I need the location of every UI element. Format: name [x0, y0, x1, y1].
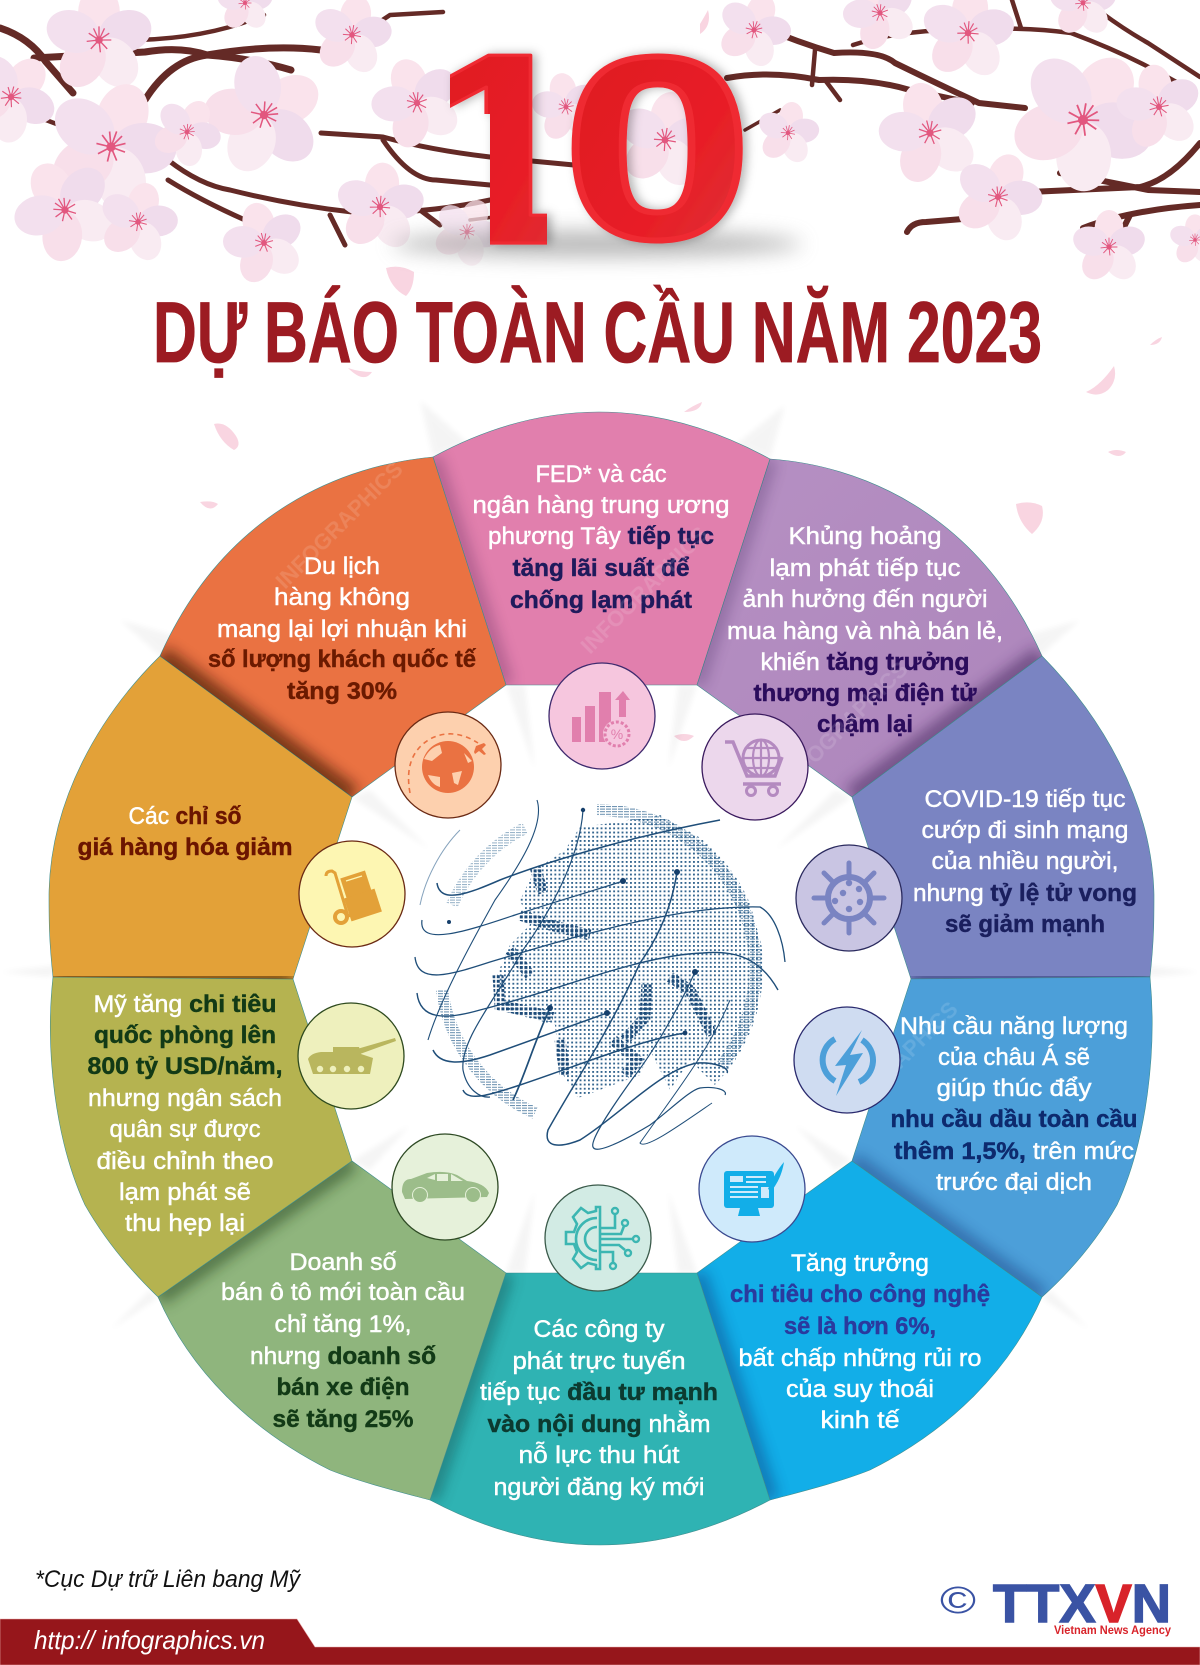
text: tech — [730, 1250, 990, 1434]
watermarks: INFOGRAPHICS — [576, 522, 713, 659]
panel: orange aviation — [160, 457, 506, 797]
text: streaming: phát trực tuyến — [512, 1348, 686, 1375]
text: aviation: số lượng khách quốc tế — [208, 646, 477, 673]
text: FED: ngân hàng trung ương — [472, 492, 730, 519]
panel: mustard commodities — [49, 656, 352, 979]
text: FED: phương Tây tiếp tục — [488, 523, 714, 550]
text: streaming: vào nội dung nhằm — [488, 1411, 710, 1438]
footer bar — [0, 1619, 1200, 1665]
text: covid — [913, 786, 1137, 938]
text: aviation: mang lại lợi nhuận khi — [217, 616, 467, 643]
icon: car — [392, 1134, 498, 1240]
text: aviation: hàng không — [274, 584, 410, 611]
seam shadows outside ring — [0, 400, 1200, 1330]
text: energy: Nhu cầu năng lượng — [900, 1013, 1128, 1040]
text: energy: của châu Á sẽ — [938, 1044, 1090, 1071]
text: inflation: thương mại điện tử — [754, 680, 977, 707]
text: defense: thu hẹp lại — [125, 1210, 245, 1237]
text: aviation: Du lịch — [304, 553, 380, 580]
icon: globe and plane — [395, 712, 501, 818]
big number 10: 1 — [411, 0, 590, 301]
text: streaming: Các công ty — [534, 1316, 664, 1343]
text: streaming: người đăng ký mới — [494, 1474, 704, 1501]
footnote: *Cục Dự trữ Liên bang Mỹ — [35, 1566, 302, 1593]
watermarks: INFOGRAPHICS — [271, 457, 408, 594]
text: covid: sẽ giảm mạnh — [945, 911, 1105, 938]
text: inflation: mua hàng và nhà bán lẻ, — [727, 618, 1003, 645]
text: tech: của suy thoái — [786, 1376, 934, 1403]
text: FED: tăng lãi suất để — [512, 555, 690, 582]
text: cars: nhưng doanh số — [250, 1343, 436, 1370]
text: defense: quốc phòng lên — [94, 1022, 276, 1049]
icon: tank — [298, 1003, 404, 1109]
text: cars — [221, 1249, 465, 1433]
text: FED: FED* và các — [536, 461, 666, 488]
text: aviation — [208, 553, 477, 705]
watermarks: INFOGRAPHICS — [826, 997, 963, 1134]
text: inflation: Khủng hoảng — [788, 523, 942, 550]
panel: cyan tech spending — [697, 1161, 1042, 1500]
text: covid: của nhiều người, — [932, 848, 1118, 875]
icon: gear circuit — [545, 1185, 651, 1291]
icon: virus — [796, 845, 902, 951]
text: energy: nhu cầu dầu toàn cầu — [890, 1106, 1138, 1133]
text: cars: chỉ tăng 1%, — [274, 1311, 412, 1338]
icon: hand truck — [299, 841, 405, 947]
logo: TTXVN: TTXVN — [993, 1574, 1171, 1634]
text: defense: 800 tỷ USD/năm, — [88, 1053, 282, 1080]
text: defense: lạm phát sẽ — [119, 1179, 251, 1206]
panel: green cars — [158, 1161, 506, 1500]
big number 10 — [392, 48, 802, 268]
text: inflation — [727, 523, 1003, 738]
logo: TTXVN: Vietnam News Agency — [1054, 1623, 1171, 1637]
branches: blossom tree — [0, 0, 1200, 245]
icon: monitor and pen — [699, 1136, 805, 1242]
text: inflation: chậm lại — [817, 711, 913, 738]
panel: olive defense — [50, 977, 352, 1297]
text: covid: cướp đi sinh mạng — [922, 817, 1128, 844]
text: FED: chống lạm phát — [510, 587, 692, 614]
panel: teal streaming — [430, 1273, 770, 1545]
panel: blue energy — [852, 977, 1152, 1297]
text: covid: nhưng tỷ lệ tử vong — [913, 880, 1137, 907]
text: streaming — [480, 1316, 718, 1501]
text: energy: giúp thúc đẩy — [936, 1075, 1092, 1102]
text: FED — [472, 461, 730, 614]
icon: shopping cart with globe — [702, 714, 808, 820]
text: cars: Doanh số — [290, 1249, 396, 1276]
watermarks: INFOGRAPHICS — [776, 657, 913, 794]
text: tech: chi tiêu cho công nghệ — [730, 1281, 990, 1308]
text: tech: bất chấp những rủi ro — [738, 1345, 982, 1372]
panel: pink FED rates — [433, 412, 770, 685]
text: defense: nhưng ngân sách — [88, 1085, 282, 1112]
text: energy: trước đại dịch — [936, 1169, 1092, 1196]
panel: periwinkle covid — [852, 656, 1154, 979]
scattered petals — [200, 10, 1162, 741]
logo: TTXVN: © — [940, 1580, 976, 1622]
text: aviation: tăng 30% — [287, 678, 397, 705]
blossoms — [0, 0, 1200, 295]
text: defense — [88, 991, 282, 1237]
icon: energy bolt — [794, 1007, 900, 1113]
panel: purple e-commerce — [697, 459, 1042, 797]
text: covid: COVID-19 tiếp tục — [924, 786, 1126, 813]
big number 10: 0 — [562, 2, 753, 294]
text: commodities: Các chỉ số — [128, 803, 242, 830]
text: inflation: khiến tăng trưởng — [760, 649, 970, 676]
text: streaming: tiếp tục đầu tư mạnh — [480, 1379, 718, 1406]
text: defense: điều chỉnh theo — [96, 1148, 274, 1175]
text: cars: bán ô tô mới toàn cầu — [221, 1279, 465, 1306]
icon: chart with percent: % — [611, 726, 623, 742]
text: inflation: ảnh hưởng đến người — [742, 586, 988, 613]
text: inflation: lạm phát tiếp tục — [770, 555, 960, 582]
text: streaming: nỗ lực thu hút — [518, 1442, 680, 1469]
text: defense: Mỹ tăng chi tiêu — [94, 991, 276, 1018]
text: cars: bán xe điện — [276, 1374, 410, 1401]
text: commodities — [78, 803, 292, 861]
globe — [415, 800, 785, 1149]
text: tech: sẽ là hơn 6%, — [784, 1313, 936, 1340]
text: tech: Tăng trưởng — [791, 1250, 929, 1277]
text: energy: thêm 1,5%, trên mức — [894, 1138, 1134, 1165]
text: energy — [890, 1013, 1138, 1196]
text: commodities: giá hàng hóa giảm — [78, 834, 292, 861]
watermarks — [271, 457, 963, 1134]
icon: chart with percent — [549, 663, 655, 769]
text: tech: kinh tế — [820, 1407, 900, 1434]
text: defense: quân sự được — [110, 1116, 260, 1143]
footer bar: http:// infographics.vn — [34, 1625, 265, 1655]
text: cars: sẽ tăng 25% — [272, 1406, 414, 1433]
